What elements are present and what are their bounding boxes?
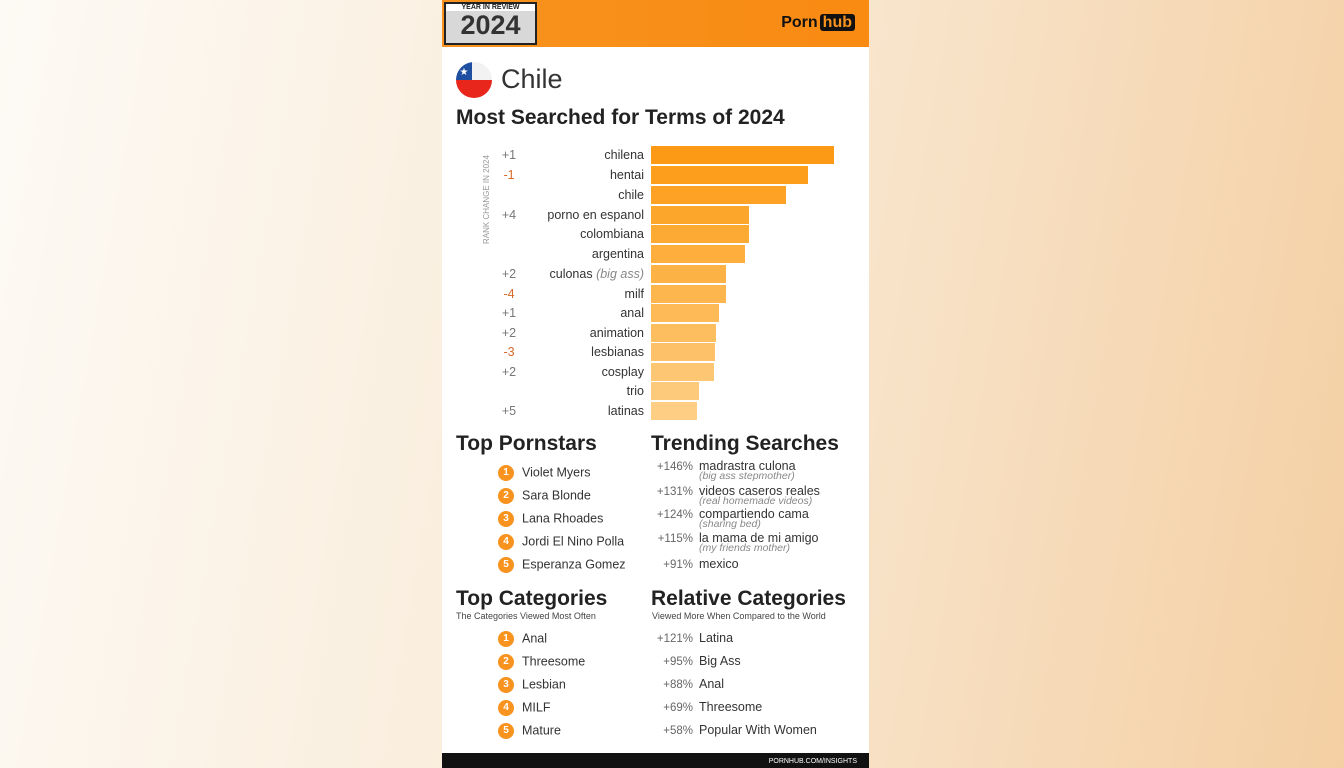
icon: chile flag: ★ bbox=[460, 67, 469, 78]
list: top pornstars: Lana Rhoades bbox=[522, 511, 603, 525]
list: top categories: 4 bbox=[503, 702, 509, 713]
list: top categories: Mature bbox=[522, 723, 561, 737]
list: relative categories: Anal bbox=[699, 677, 724, 691]
bar chart: anal bbox=[620, 306, 644, 320]
footer bar: PORNHUB.COM/INSIGHTS bbox=[769, 758, 857, 765]
list: trending searches: videos caseros reales bbox=[699, 484, 820, 498]
bar chart: +5 bbox=[502, 404, 516, 418]
list: relative categories: +58% bbox=[663, 725, 693, 737]
list: top pornstars: Esperanza Gomez bbox=[522, 557, 626, 571]
bar chart: hentai bbox=[610, 168, 644, 182]
bar chart: lesbianas bbox=[591, 345, 644, 359]
list: top pornstars: 4 bbox=[503, 536, 509, 547]
list: top pornstars: 2 bbox=[503, 490, 509, 501]
list: relative categories bbox=[657, 631, 817, 737]
header banner bbox=[442, 0, 869, 47]
list: top categories: 3 bbox=[503, 679, 509, 690]
bar chart: milf bbox=[625, 287, 644, 301]
bar chart: +2 bbox=[502, 365, 516, 379]
list: trending searches bbox=[657, 459, 820, 571]
list: relative categories: Latina bbox=[699, 631, 733, 645]
list: top categories: MILF bbox=[522, 700, 550, 714]
list: relative categories: +95% bbox=[663, 656, 693, 668]
list: relative categories: +88% bbox=[663, 679, 693, 691]
list: top categories bbox=[498, 631, 585, 739]
country heading bbox=[456, 62, 563, 98]
bar chart: cosplay bbox=[602, 365, 644, 379]
list: relative categories: +69% bbox=[663, 702, 693, 714]
list: trending searches: la mama de mi amigo bbox=[699, 531, 818, 545]
bar chart: -1 bbox=[503, 168, 515, 182]
list: trending searches: (sharing bed) bbox=[699, 518, 761, 530]
list: relative categories: Big Ass bbox=[699, 654, 741, 668]
list: trending searches: compartiendo cama bbox=[699, 507, 809, 521]
bar chart: +4 bbox=[502, 208, 516, 222]
footer bar bbox=[442, 753, 869, 768]
bar chart: -4 bbox=[503, 287, 515, 301]
list: trending searches: +146% bbox=[657, 461, 693, 473]
list: trending searches: madrastra culona bbox=[699, 459, 796, 473]
list: trending searches: (my friends mother) bbox=[699, 542, 790, 554]
bar chart: culonas (big ass) bbox=[550, 267, 644, 281]
icon: chile flag bbox=[456, 62, 492, 98]
list: trending searches: mexico bbox=[699, 557, 739, 571]
bar chart: -3 bbox=[503, 345, 515, 359]
title: Most Searched for Terms of 2024 bbox=[456, 106, 785, 129]
list: trending searches: +124% bbox=[657, 509, 693, 521]
bar chart: +1 bbox=[502, 148, 516, 162]
list: top pornstars: Violet Myers bbox=[522, 465, 591, 479]
bar chart: colombiana bbox=[580, 227, 644, 241]
bar chart bbox=[502, 146, 834, 420]
list: top categories: Anal bbox=[522, 631, 547, 645]
bar chart: trio bbox=[627, 384, 644, 398]
list: top categories: 1 bbox=[503, 633, 509, 644]
vertical axis label: RANK CHANGE IN 2024 bbox=[482, 155, 491, 244]
bar chart: +2 bbox=[502, 326, 516, 340]
heading: relative categories: Relative Categories bbox=[651, 587, 846, 610]
list: relative categories: +121% bbox=[657, 633, 693, 645]
panel: main card bbox=[442, 0, 869, 768]
list: top pornstars: Jordi El Nino Polla bbox=[522, 534, 624, 548]
list: trending searches: (real homemade videos) bbox=[699, 495, 812, 507]
bar chart: latinas bbox=[608, 404, 644, 418]
bar chart: +1 bbox=[502, 306, 516, 320]
list: trending searches: (big ass stepmother) bbox=[699, 470, 795, 482]
logo: year in review 2024: YEAR IN REVIEW bbox=[462, 4, 519, 11]
list: trending searches: +91% bbox=[663, 559, 693, 571]
list: top categories: 5 bbox=[503, 725, 509, 736]
list: top categories: Lesbian bbox=[522, 677, 566, 691]
heading: top categories: Top Categories bbox=[456, 587, 607, 610]
list: top pornstars: 3 bbox=[503, 513, 509, 524]
list: top categories: 2 bbox=[503, 656, 509, 667]
bar chart: chile bbox=[618, 188, 644, 202]
bar chart: animation bbox=[590, 326, 644, 340]
list: top categories: Threesome bbox=[522, 654, 585, 668]
panel: main card: Viewed More When Compared to the World bbox=[652, 611, 826, 621]
list: trending searches: +131% bbox=[657, 486, 693, 498]
bar chart: porno en espanol bbox=[547, 208, 644, 222]
bar chart: chilena bbox=[604, 148, 644, 162]
country heading: Chile bbox=[501, 64, 563, 94]
logo: year in review 2024 bbox=[444, 2, 537, 45]
bar chart: argentina bbox=[592, 247, 644, 261]
list: top pornstars: 1 bbox=[503, 467, 509, 478]
heading: top pornstars: Top Pornstars bbox=[456, 432, 597, 455]
list: top pornstars bbox=[498, 465, 626, 573]
list: relative categories: Popular With Women bbox=[699, 723, 817, 737]
list: top pornstars: Sara Blonde bbox=[522, 488, 591, 502]
panel: main card: The Categories Viewed Most Often bbox=[456, 611, 596, 621]
list: trending searches: +115% bbox=[658, 533, 693, 545]
logo: brand: Porn hub bbox=[781, 14, 852, 31]
logo: year in review 2024: 2024 bbox=[460, 10, 521, 40]
heading: trending searches: Trending Searches bbox=[651, 432, 839, 455]
list: top pornstars: 5 bbox=[503, 559, 509, 570]
bar chart: +2 bbox=[502, 267, 516, 281]
list: relative categories: Threesome bbox=[699, 700, 762, 714]
